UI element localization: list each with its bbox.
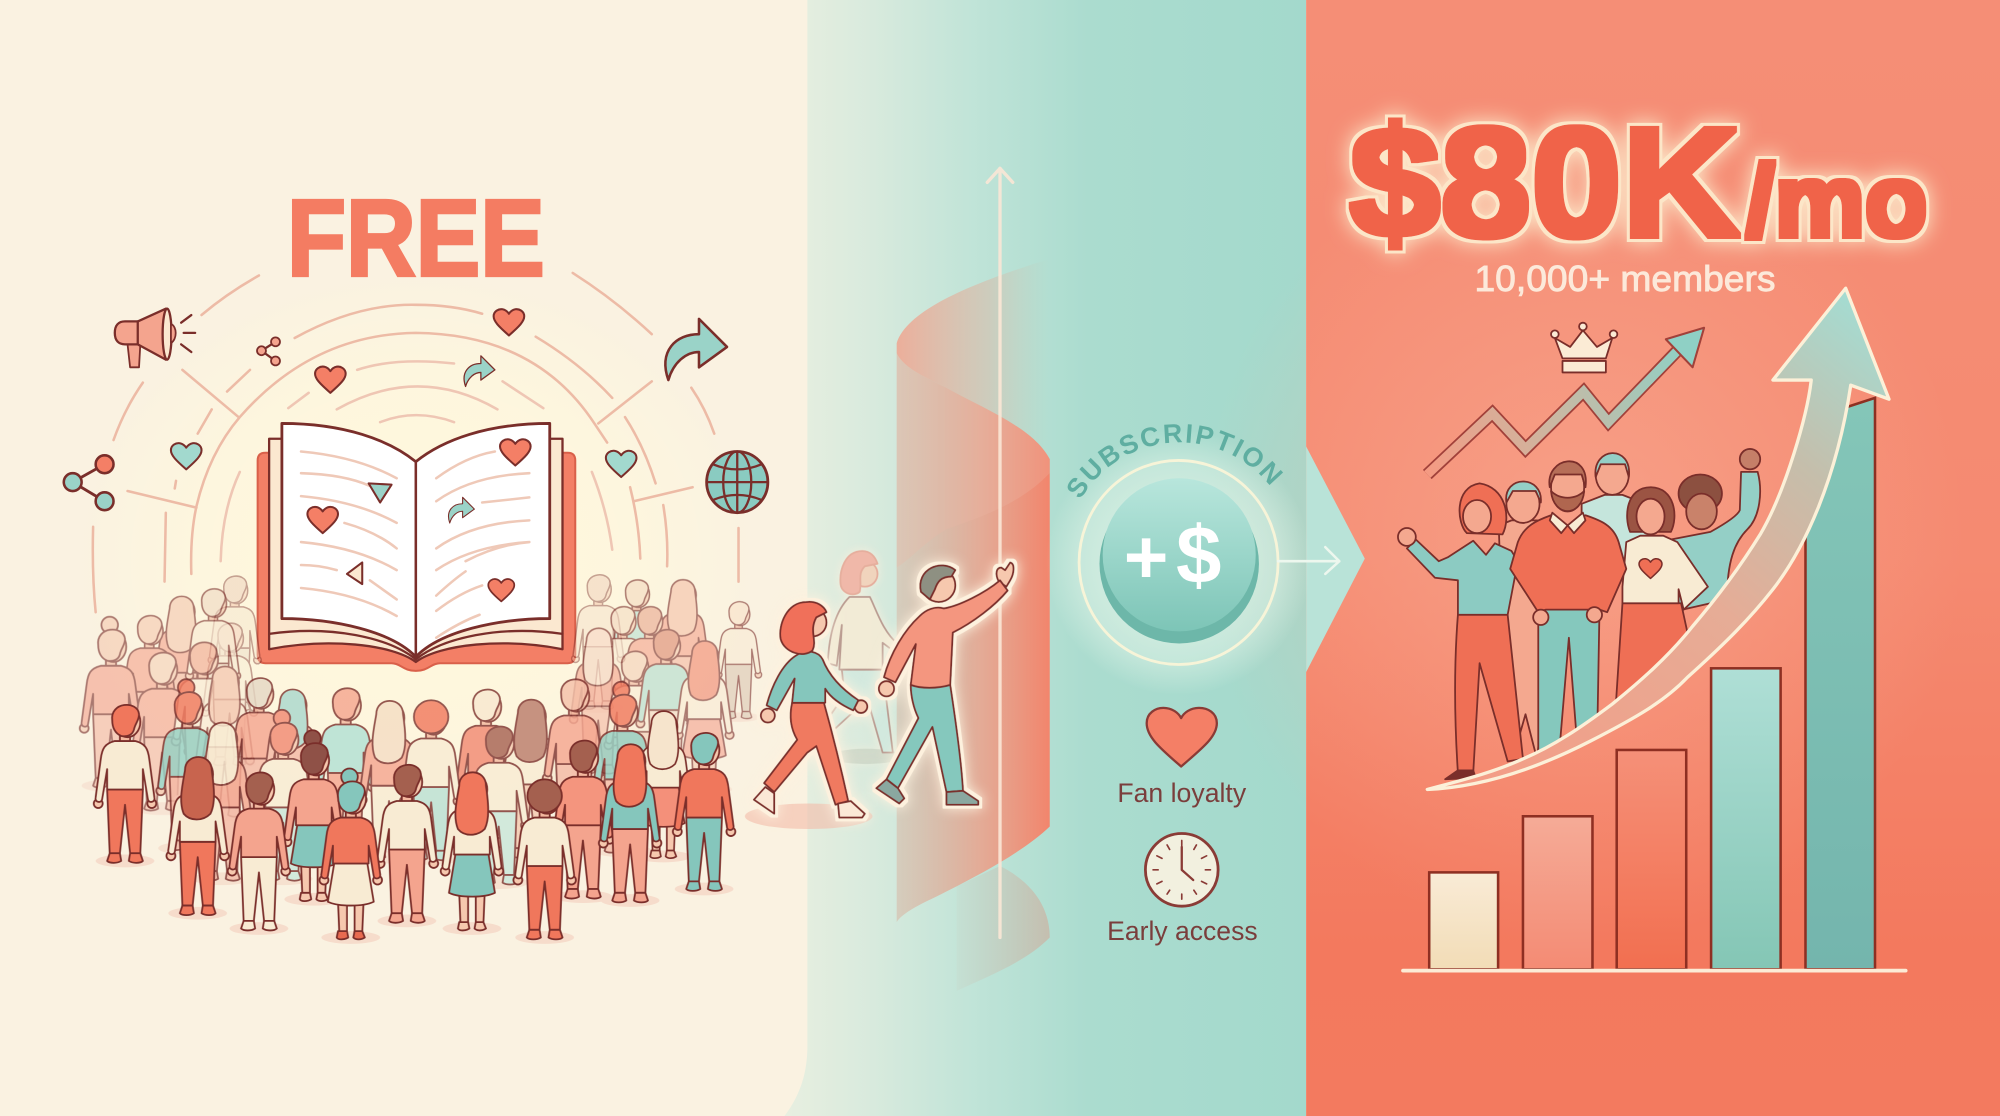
subscription ring [1079, 460, 1278, 664]
benefit: fan loyalty [1117, 708, 1247, 808]
bar 1 [1429, 872, 1498, 969]
crowd of readers [80, 575, 762, 944]
walkers [745, 551, 1014, 829]
member: back right [1582, 453, 1652, 561]
icon: teal heart left [171, 443, 202, 469]
ribbon top fold [897, 259, 1050, 459]
background: coral results panel [1306, 0, 2000, 1116]
icon: teal heart right [606, 451, 636, 477]
member: back left [1498, 480, 1542, 752]
member: right woman with heart shirt [1615, 487, 1708, 721]
subscription button [1099, 478, 1259, 643]
arrow on right page [449, 497, 474, 523]
bar 5 [1805, 398, 1875, 969]
icon: big curved arrow [665, 319, 727, 380]
background: teal transition zone [784, 0, 1306, 1116]
subscription label: SUBSCRIPTION [1068, 424, 1283, 497]
subscription button glow [1046, 430, 1311, 695]
members subtitle: 10,000+ members [1474, 258, 1776, 299]
bar chart [1403, 398, 1906, 971]
crowd: faint back row [201, 575, 625, 769]
benefit: early access: Early access [1107, 916, 1258, 946]
book open pages [282, 423, 550, 657]
bar 2 [1523, 816, 1592, 969]
walking man reaching up [876, 562, 1014, 805]
walking woman [754, 602, 867, 818]
icon: megaphone [115, 309, 195, 367]
zigzag growth arrow [1427, 328, 1704, 474]
upward arrow line [987, 168, 1013, 937]
revenue headline: $80K [1349, 95, 1740, 269]
book hearts [500, 439, 531, 466]
benefit: early access [1107, 833, 1258, 946]
group of members [1398, 449, 1760, 779]
plus dollar label: + [1124, 515, 1168, 600]
icon: small share [257, 337, 280, 365]
open book [258, 423, 575, 671]
radiating arcs from the book [93, 273, 739, 612]
book cover [258, 453, 575, 671]
chart baseline [1403, 969, 1906, 972]
icon: large share [64, 455, 114, 510]
ghost walker [827, 551, 902, 764]
member: left woman waving [1398, 483, 1523, 779]
big growth arrow [1427, 288, 1889, 789]
ribbon lighter fold [897, 353, 1050, 568]
background: warm light behind the members [1199, 128, 1964, 944]
member: raised fist [1671, 449, 1760, 612]
triangle cream [347, 562, 362, 584]
bar 4 [1711, 668, 1781, 969]
icon: crown [1551, 323, 1617, 372]
walker shadow [745, 804, 872, 829]
triangle teal [369, 483, 392, 503]
icon: heart top right [494, 309, 524, 335]
icon: small curved arrow [464, 356, 495, 386]
bar 3 [1617, 750, 1686, 969]
plus dollar label: $ [1176, 510, 1221, 601]
heart on lower right page [488, 579, 514, 601]
crowd: middle row [156, 678, 654, 889]
arrow from button to results [1278, 547, 1339, 574]
crowd: pale back row [80, 580, 762, 821]
book page stack [269, 439, 562, 662]
revenue headline: /mo [1746, 144, 1927, 258]
heading: FREE: FREE [287, 177, 545, 298]
book glow [71, 268, 760, 855]
ribbon body [897, 353, 1050, 922]
heart on left page [307, 507, 338, 533]
ribbon lower fold [957, 866, 1050, 991]
icon: globe [707, 452, 768, 513]
benefit: fan loyalty: Fan loyalty [1117, 778, 1247, 808]
member: center bearded man [1510, 461, 1626, 759]
transition ribbon [897, 259, 1050, 991]
crowd: front row [94, 705, 735, 944]
book text lines [301, 452, 529, 638]
icon: heart top left [315, 367, 346, 393]
background: teal chevron [1306, 446, 1365, 672]
